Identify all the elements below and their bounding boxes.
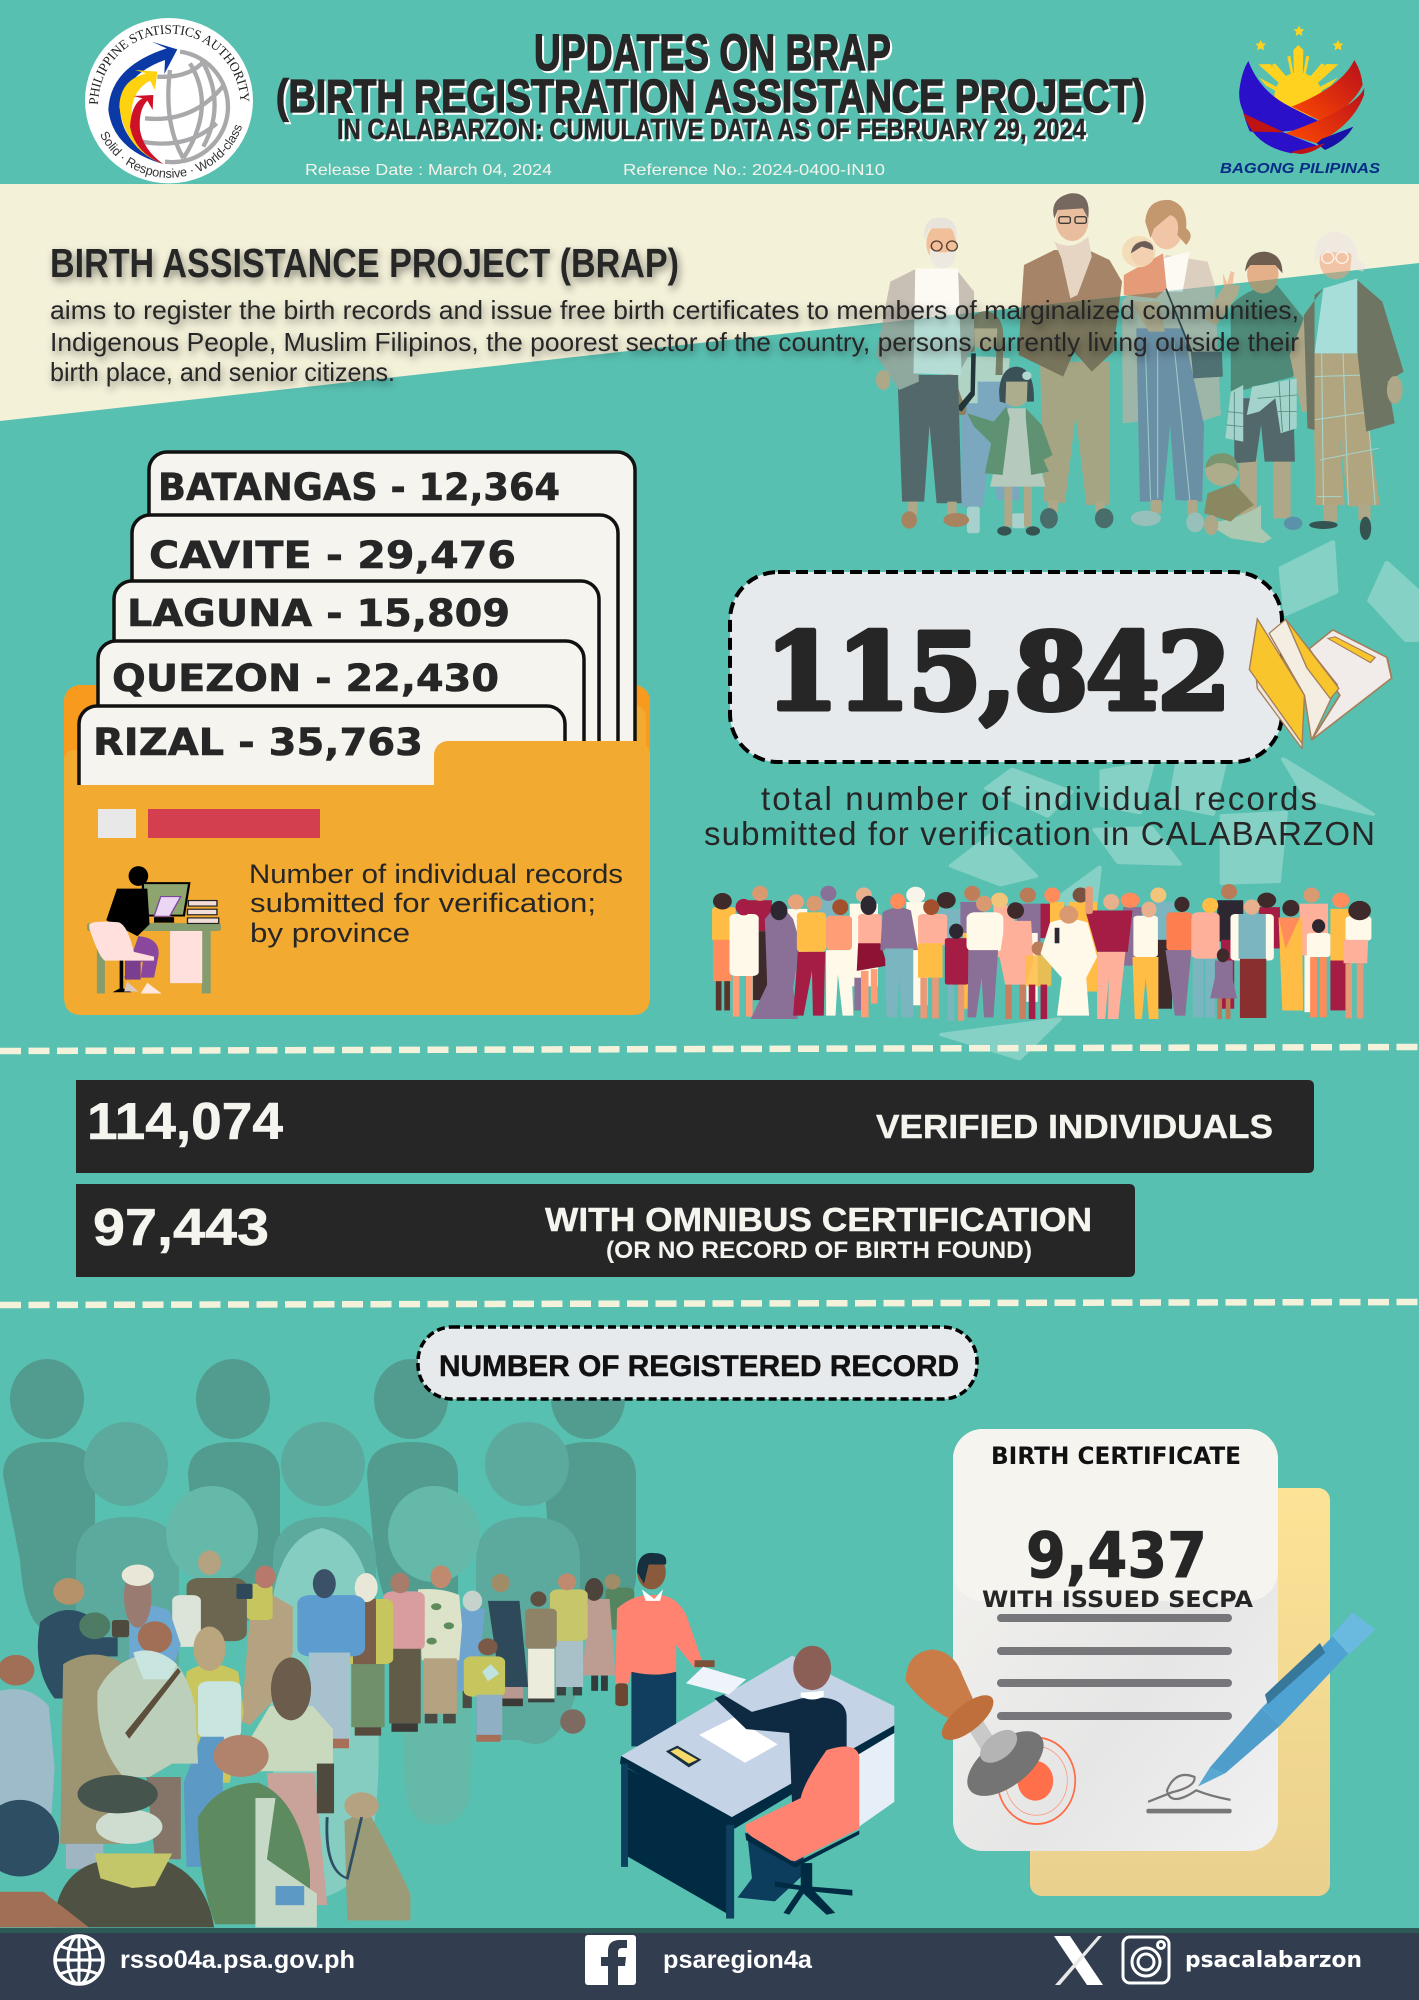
silhouettes of people (3, 1359, 636, 1900)
stat bar: omnibus certification (76, 1184, 1135, 1277)
panel: records by province folder (64, 452, 650, 1015)
folder front (64, 741, 650, 1015)
facebook handle: psaregion4a (663, 1946, 813, 1974)
social handle: psacalabarzon (1185, 1948, 1362, 1973)
website: rsso04a.psa.gov.ph (120, 1946, 355, 1974)
stamp and pen (906, 1614, 1373, 1824)
logo: Philippine Statistics Authority: PHILIPPINE STATISTICS AUTHORITY (89, 24, 250, 104)
title: (BIRTH REGISTRATION ASSISTANCE PROJECT) (276, 70, 1145, 122)
card: Rizal (79, 706, 565, 826)
total caption: submitted for verification in CALABARZON (704, 815, 1375, 852)
icon: X (1054, 1936, 1103, 1985)
seated officer (686, 1646, 859, 1915)
highlighted silhouette (270, 1528, 379, 1900)
certificate text lines (997, 1614, 1232, 1720)
total caption: total number of individual records (761, 780, 1317, 817)
icon: person at desk (87, 866, 221, 993)
footer (0, 1928, 1419, 2000)
folder caption: by province (250, 918, 410, 948)
icon: instagram camera (1123, 1937, 1169, 1983)
card: Laguna: LAGUNA - 15,809 (127, 592, 510, 635)
stat bar: verified individuals: 114,074 (87, 1093, 283, 1151)
clerk at reception (615, 1553, 715, 1746)
icon: facebook (585, 1935, 636, 1985)
folder caption (249, 859, 623, 948)
description: aims to register the birth records and issue free birth certificates to members of marginalized communities, (50, 295, 1299, 325)
folder caption: submitted for verification; (250, 888, 596, 918)
card: Laguna (114, 581, 599, 801)
rubber stamp (906, 1650, 1053, 1809)
card: Cavite (132, 515, 618, 795)
logo: Bagong Pilipinas (1220, 26, 1380, 177)
front row silhouettes (166, 1486, 480, 1825)
total caption (704, 780, 1375, 852)
panel: total records (704, 572, 1392, 1021)
heading: BIRTH ASSISTANCE PROJECT (BRAP) (50, 240, 679, 286)
certificate number: 9,437 (1026, 1519, 1207, 1592)
front row (712, 886, 1371, 1021)
folder caption: Number of individual records (249, 859, 623, 889)
logo: Philippine Statistics Authority (85, 18, 253, 184)
stat bar: verified individuals (76, 1080, 1314, 1173)
desk (620, 1656, 894, 1919)
pill heading: NUMBER OF REGISTERED RECORD (439, 1350, 959, 1383)
illustration: queue at registration desk (0, 1550, 894, 1927)
pill heading (418, 1327, 977, 1399)
certificate heading: BIRTH CERTIFICATE (991, 1442, 1241, 1470)
title (276, 24, 1145, 146)
back row (748, 884, 1352, 1012)
reference number: Reference No.: 2024-0400-IN10 (623, 162, 885, 179)
header (85, 18, 1380, 184)
card: Cavite: CAVITE - 29,476 (149, 534, 516, 577)
illustration: multigenerational family (876, 193, 1404, 543)
card: Rizal: RIZAL - 35,763 (93, 721, 423, 764)
folder back (64, 685, 650, 885)
back row silhouettes (3, 1359, 636, 1630)
middle row silhouettes (76, 1422, 580, 1810)
yellow backing sheet (1030, 1488, 1330, 1896)
card: Batangas: BATANGAS - 12,364 (158, 466, 560, 509)
description (50, 295, 1299, 387)
cream diagonal band (0, 184, 1419, 421)
card: Quezon (98, 641, 584, 811)
total box (730, 572, 1282, 762)
release date: Release Date : March 04, 2024 (305, 162, 552, 179)
footer bar (0, 1928, 1419, 2000)
card: Quezon: QUEZON - 22,430 (112, 657, 499, 700)
dashed dividers (0, 1047, 1419, 1051)
logo: Bagong Pilipinas: BAGONG PILIPINAS (1220, 160, 1380, 177)
floating translucent papers (942, 542, 1419, 1059)
pen (1198, 1614, 1373, 1787)
signature (1146, 1775, 1232, 1813)
queue: front line (0, 1709, 585, 1927)
red seal (998, 1738, 1075, 1824)
icon: globe (55, 1936, 103, 1984)
section intro (50, 240, 1299, 387)
logo: Philippine Statistics Authority: Solid · Responsive · World-class (100, 124, 242, 178)
description: Indigenous People, Muslim Filipinos, the poorest sector of the country, persons currently living outside their (50, 327, 1299, 357)
queue: middle line (0, 1612, 505, 1905)
description: birth place, and senior citizens. (50, 357, 395, 387)
certificate sheet (953, 1429, 1278, 1851)
certificate (906, 1429, 1373, 1896)
title: IN CALABARZON: CUMULATIVE DATA AS OF FEBRUARY 29, 2024 (337, 114, 1086, 146)
card: Batangas (149, 452, 635, 782)
stat bar: omnibus certification: (OR NO RECORD OF BIRTH FOUND) (606, 1237, 1032, 1264)
illustration: diverse crowd (712, 884, 1371, 1021)
folder label tab (98, 809, 320, 838)
stat bar: omnibus certification: 97,443 (93, 1199, 269, 1257)
stat bar: omnibus certification: WITH OMNIBUS CERTIFICATION (545, 1201, 1092, 1238)
queue: back line (38, 1550, 634, 1748)
certificate label: WITH ISSUED SECPA (982, 1588, 1253, 1613)
title: UPDATES ON BRAP (534, 24, 891, 81)
total number: 115,842 (765, 609, 1231, 734)
stat bar: verified individuals: VERIFIED INDIVIDUALS (876, 1108, 1273, 1145)
icon: open folder with papers (1249, 619, 1392, 749)
